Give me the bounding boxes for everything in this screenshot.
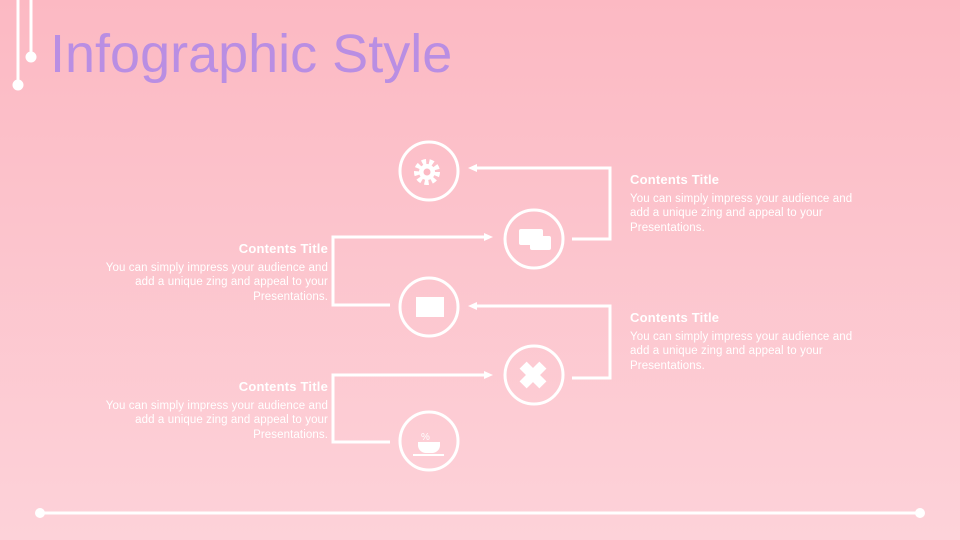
text block 4: Contents Title xyxy=(239,379,328,394)
text block 4: You can simply impress your audience and add a unique zing and appeal to your Presentations. xyxy=(106,400,328,440)
icon: gear xyxy=(400,142,458,200)
text block 3: Contents Title xyxy=(630,310,719,325)
icon: rectangle xyxy=(400,278,458,336)
title: Infographic Style xyxy=(50,24,452,84)
text block 1: Contents Title xyxy=(630,172,719,187)
icon: coffee xyxy=(400,412,458,470)
text block 2: Contents Title xyxy=(239,241,328,256)
icon: coffee: % xyxy=(421,432,430,443)
text block 2 xyxy=(106,241,328,302)
text block 1: You can simply impress your audience and add a unique zing and appeal to your Presentations. xyxy=(630,192,852,234)
text block 3: You can simply impress your audience and add a unique zing and appeal to your Presentations. xyxy=(630,330,852,372)
text block 4 xyxy=(106,379,328,440)
text block 3 xyxy=(630,310,852,372)
text block 2: You can simply impress your audience and add a unique zing and appeal to your Presentations. xyxy=(106,262,328,302)
icon: puzzle xyxy=(505,346,563,404)
text block 1 xyxy=(630,172,852,234)
icon: chat xyxy=(505,210,563,268)
